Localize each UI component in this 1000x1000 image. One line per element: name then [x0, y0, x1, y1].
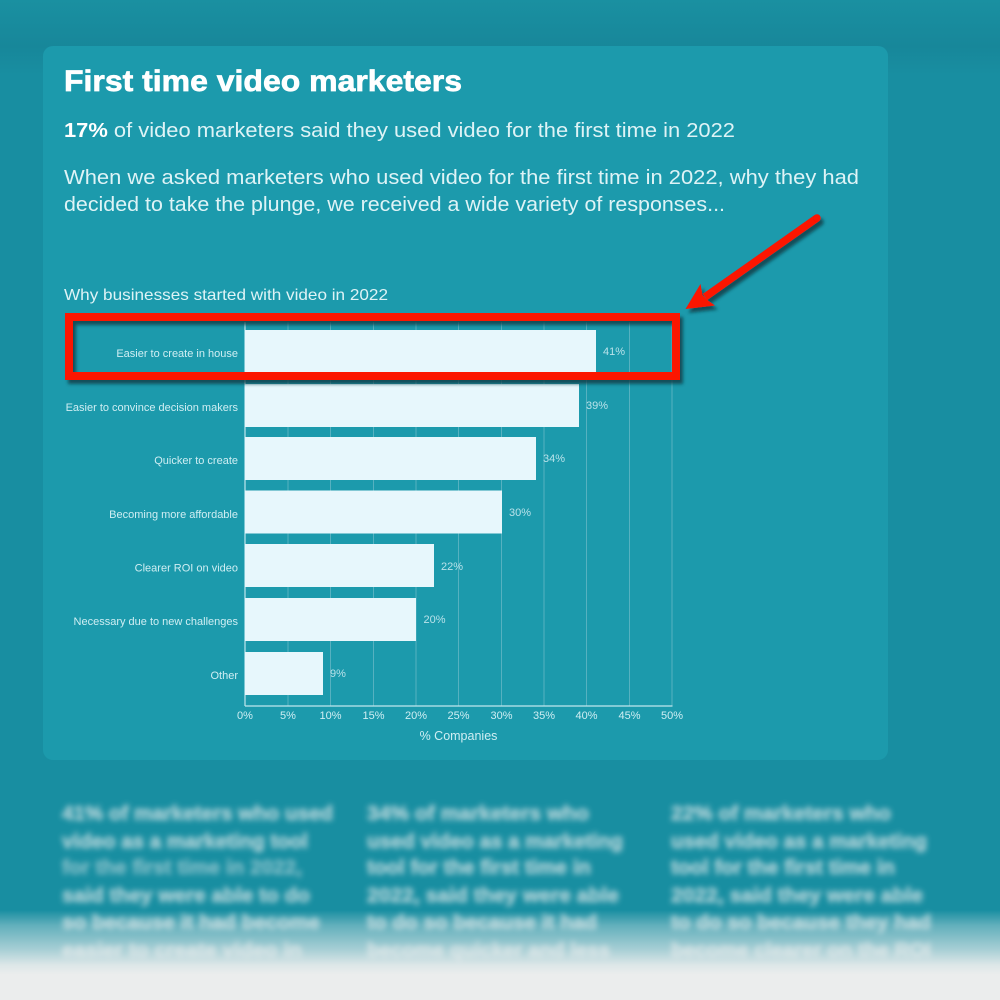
x axis tick labels: 20%	[405, 710, 427, 722]
chart title: Why businesses started with video in 2022	[64, 287, 388, 304]
value labels: 9%	[330, 668, 346, 680]
bottom fade overlay	[0, 910, 1000, 1000]
x axis tick labels	[237, 710, 683, 722]
column 1: easier to create video in	[62, 940, 302, 962]
title: First time video marketers	[64, 65, 462, 98]
description text: decided to take the plunge, we received a wide variety of responses...	[64, 194, 725, 216]
column 3	[671, 803, 931, 962]
category labels: Clearer ROI on video	[135, 562, 238, 574]
x axis tick labels: 10%	[319, 710, 342, 722]
value labels: 39%	[586, 400, 608, 412]
column 1	[62, 803, 333, 962]
column 2	[367, 803, 623, 962]
column 1: so because it had become	[62, 912, 320, 934]
x axis tick labels: 5%	[280, 710, 296, 722]
x axis tick labels: 0%	[237, 710, 253, 722]
column 1: for the first time in 2022,	[62, 857, 302, 879]
value labels: 41%	[603, 346, 625, 358]
grid lines	[288, 322, 672, 706]
value labels: 22%	[441, 561, 463, 573]
category labels: Easier to convince decision makers	[66, 402, 238, 414]
category labels: Becoming more affordable	[109, 509, 238, 521]
column 3: used video as a marketing	[671, 831, 927, 853]
column 3: tool for the first time in	[671, 857, 895, 879]
arrow pointing to highlight box	[686, 214, 821, 309]
column 1: video as a marketing tool	[62, 831, 308, 853]
category labels: Necessary due to new challenges	[74, 616, 238, 628]
x axis tick labels: 45%	[618, 710, 641, 722]
category labels: Easier to create in house	[116, 348, 238, 360]
column 1: said they were able to do	[62, 885, 310, 907]
x axis tick labels: 50%	[661, 710, 683, 722]
value labels: 30%	[509, 507, 531, 519]
description text	[64, 167, 859, 216]
x axis title: % Companies	[420, 729, 497, 743]
x axis tick labels: 35%	[533, 710, 555, 722]
column 3: become clearer on the ROI	[671, 940, 931, 962]
description text: When we asked marketers who used video for the first time in 2022, why they had	[64, 167, 859, 189]
highlight box around top bar	[69, 317, 676, 376]
value labels: 34%	[543, 453, 565, 465]
category labels: Other	[210, 670, 238, 682]
column 2: tool for the first time in	[367, 857, 591, 879]
column 1: 41% of marketers who used	[62, 803, 333, 825]
column 2: become quicker and less	[367, 940, 610, 962]
axes	[245, 322, 672, 706]
intro stat text: 17% of video marketers said they used video for the first time in 2022	[64, 120, 735, 142]
column 3: 22% of marketers who	[671, 803, 891, 825]
x axis tick labels: 25%	[447, 710, 470, 722]
category labels	[66, 348, 238, 682]
x axis tick labels: 30%	[490, 710, 513, 722]
value labels: 20%	[424, 614, 446, 626]
x axis tick labels: 15%	[362, 710, 385, 722]
column 3: to do so because they had	[671, 912, 931, 934]
column 2: 2022, said they were able	[367, 885, 619, 907]
value labels	[330, 346, 625, 680]
x axis tick labels: 40%	[575, 710, 598, 722]
bar chart: why businesses started with video	[66, 322, 683, 743]
blurred text columns	[62, 803, 931, 962]
panel: first time video marketers	[43, 46, 888, 760]
bars	[245, 330, 596, 695]
column 2: 34% of marketers who	[367, 803, 589, 825]
column 2: used video as a marketing	[367, 831, 623, 853]
column 2: to do so because it had	[367, 912, 597, 934]
category labels: Quicker to create	[154, 455, 238, 467]
column 3: 2022, said they were able	[671, 885, 923, 907]
